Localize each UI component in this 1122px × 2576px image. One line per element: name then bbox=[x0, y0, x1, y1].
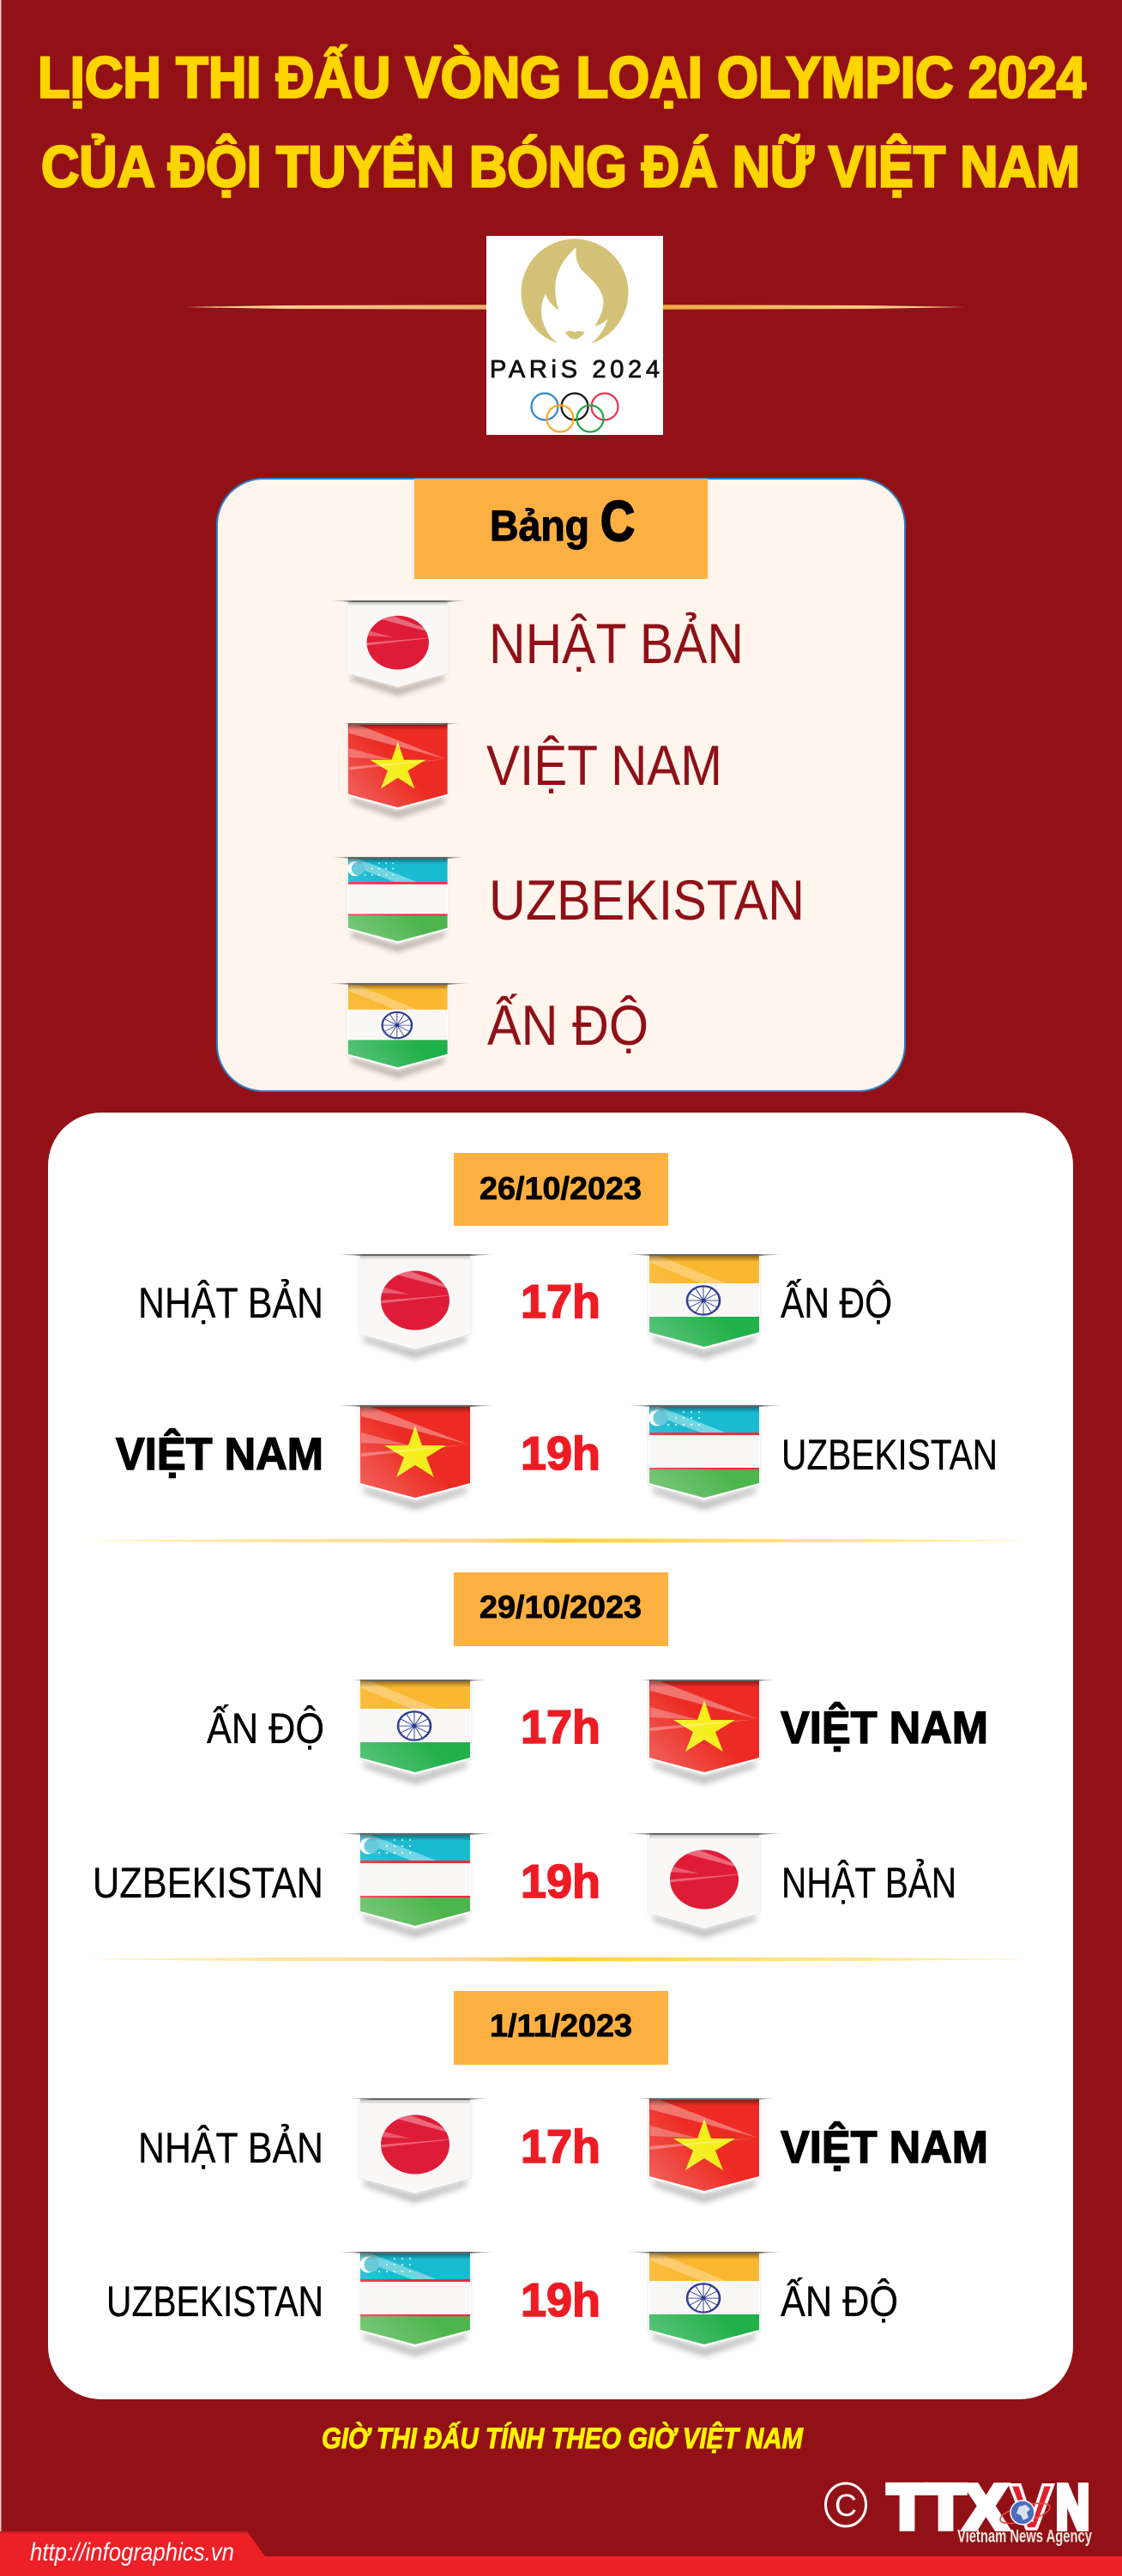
logo: TTXVN: N bbox=[1056, 2474, 1089, 2543]
team: India: ẤN ĐỘ bbox=[487, 993, 648, 1057]
group heading: C bbox=[600, 489, 635, 552]
match: Japan vs Vietnam, 17h: NHẬT BẢN bbox=[138, 2124, 323, 2172]
match: India vs Vietnam, 17h: ẤN ĐỘ bbox=[207, 1704, 324, 1753]
date: 1/11/2023: 1/11/2023 bbox=[490, 2008, 632, 2043]
team: Uzbekistan: UZBEKISTAN bbox=[489, 868, 805, 932]
match: Uzbekistan vs Japan, 19h bbox=[93, 1833, 956, 1938]
team: India bbox=[327, 983, 648, 1078]
match: Japan vs Vietnam, 17h: 17h bbox=[521, 2120, 600, 2173]
footer bar bbox=[0, 2531, 1122, 2576]
match: Vietnam vs Uzbekistan, 19h: VIỆT NAM bbox=[116, 1427, 323, 1480]
title bbox=[38, 45, 1086, 199]
date: 1/11/2023 bbox=[454, 1991, 668, 2065]
logo: Paris 2024 bbox=[486, 236, 663, 435]
note: times are Vietnam time: GIỜ THI ĐẤU TÍNH THEO GIỜ VIỆT NAM bbox=[322, 2422, 804, 2455]
match: Japan vs India, 17h: ẤN ĐỘ bbox=[781, 1279, 892, 1327]
match: Japan vs India, 17h: NHẬT BẢN bbox=[138, 1279, 323, 1327]
team: Japan bbox=[329, 600, 744, 696]
match: Uzbekistan vs India, 19h: 19h bbox=[521, 2273, 600, 2326]
logo: TTXVN: V bbox=[1010, 2471, 1053, 2543]
match: Japan vs Vietnam, 17h: VIỆT NAM bbox=[781, 2121, 988, 2173]
match: Uzbekistan vs Japan, 19h: UZBEKISTAN bbox=[93, 1859, 323, 1907]
date: 29/10/2023: 29/10/2023 bbox=[480, 1590, 642, 1625]
date: 26/10/2023 bbox=[454, 1153, 668, 1226]
team: Japan: NHẬT BẢN bbox=[489, 612, 744, 675]
match: Uzbekistan vs Japan, 19h: 19h bbox=[521, 1855, 600, 1908]
match: Uzbekistan vs Japan, 19h: NHẬT BẢN bbox=[781, 1859, 956, 1907]
match: Japan vs India, 17h: 17h bbox=[521, 1275, 600, 1328]
group heading bbox=[414, 479, 708, 579]
logo: Paris 2024: PARiS 2024 bbox=[490, 356, 660, 383]
panel: match schedule bbox=[48, 1113, 1073, 2399]
logo: TTXVN bbox=[888, 2471, 1092, 2546]
match: India vs Vietnam, 17h: 17h bbox=[521, 1700, 600, 1753]
team: Uzbekistan bbox=[329, 857, 805, 952]
match: Vietnam vs Uzbekistan, 19h: 19h bbox=[521, 1427, 600, 1480]
match: India vs Vietnam, 17h bbox=[207, 1680, 988, 1784]
team: Vietnam: VIỆT NAM bbox=[486, 733, 722, 797]
match: Uzbekistan vs India, 19h: UZBEKISTAN bbox=[106, 2277, 323, 2326]
copyright mark: C bbox=[835, 2488, 857, 2523]
panel: group C bbox=[217, 479, 905, 1091]
date: 29/10/2023 bbox=[454, 1572, 668, 1646]
group heading: Bảng bbox=[490, 502, 589, 550]
team: Vietnam bbox=[339, 723, 722, 818]
match: India vs Vietnam, 17h: VIỆT NAM bbox=[781, 1701, 988, 1753]
date: 26/10/2023: 26/10/2023 bbox=[480, 1171, 642, 1206]
match: Japan vs India, 17h bbox=[138, 1254, 892, 1359]
match: Uzbekistan vs India, 19h bbox=[106, 2252, 898, 2356]
match: Vietnam vs Uzbekistan, 19h: UZBEKISTAN bbox=[781, 1431, 998, 1479]
website url: http://infographics.vn bbox=[30, 2538, 234, 2567]
match: Japan vs Vietnam, 17h bbox=[138, 2098, 988, 2203]
match: Vietnam vs Uzbekistan, 19h bbox=[116, 1405, 998, 1510]
logo divider line bbox=[184, 305, 964, 310]
logo: TTXVN: TTX bbox=[888, 2474, 1007, 2543]
match: Uzbekistan vs India, 19h: ẤN ĐỘ bbox=[781, 2277, 898, 2326]
copyright mark bbox=[825, 2483, 866, 2526]
